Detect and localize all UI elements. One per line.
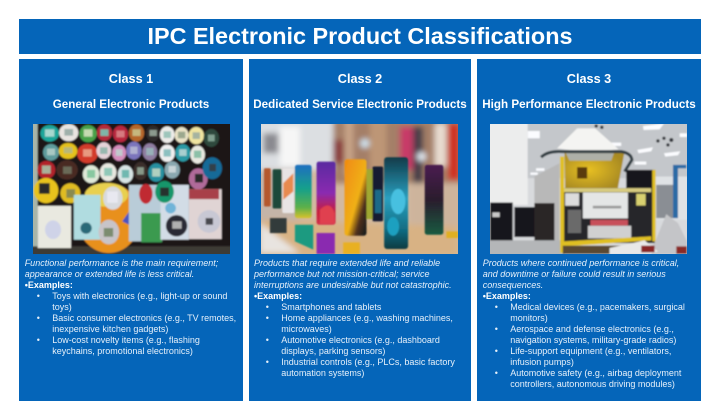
image: collection of electronic toys [33,124,230,254]
example: life-support: Life-support equipment (e.g., ventilators, [510,346,671,356]
label: examples: •Examples: [483,290,531,300]
description: class 3: consequences. [483,280,543,290]
example: aerospace and defense [510,324,676,346]
example: automotive electronics [281,334,440,356]
example: aerospace and defense: Aerospace and defense electronics (e.g., [510,324,674,334]
example: industrial controls: automation systems) [281,368,364,378]
subheading: dedicated service electronic products: Dedicated Service Electronic Products [253,98,467,110]
subheading: high performance electronic products: High Performance Electronic Products [482,98,696,110]
label: examples: •Examples: [254,290,302,300]
image: spacecraft in clean room [490,124,687,254]
example: home appliances: Home appliances (e.g., washing machines, [281,312,453,322]
example: toys: toys) [52,302,72,312]
heading: class 3: Class 3 [567,72,611,86]
example: industrial controls: Industrial controls (e.g., PLCs, basic factory [281,356,455,366]
examples list: class 2 [254,290,455,378]
description: class 1 [24,258,218,279]
example: automotive safety: Automotive safety (e.g., airbag deployment [510,368,681,378]
example: toys: Toys with electronics (e.g., light-up or sound [52,290,227,300]
label: examples: •Examples: [25,280,73,290]
example: basic consumer electronics [52,312,236,334]
example: home appliances: microwaves) [281,324,332,334]
image: row of smartphones on display [261,124,458,254]
examples list: class 1 [25,280,236,356]
example: medical devices: Medical devices (e.g., pacemakers, surgical [510,302,685,312]
example: medical devices [510,302,685,324]
panel: class 2 [249,59,471,401]
heading: class 1: Class 1 [109,72,153,86]
example: novelty items: keychains, promotional electronics) [52,346,193,356]
example: industrial controls [281,356,455,378]
example: basic consumer electronics: Basic consumer electronics (e.g., TV remotes, [52,312,236,322]
example: aerospace and defense: navigation systems, military-grade radios) [510,334,676,344]
example: novelty items [52,334,200,356]
title banner [19,19,701,54]
description: class 1: appearance or extended life is less critical. [25,268,194,278]
heading: class 2: Class 2 [338,72,382,86]
description: class 3: and downtime or failure could result in serious [483,268,666,278]
example: automotive electronics: displays, parking sensors) [281,346,385,356]
example: toys [52,290,227,312]
description: class 3: Products where continued performance is critical, [483,258,679,268]
example: automotive safety [510,368,681,390]
panel: class 1 [19,59,243,401]
example: life-support: infusion pumps) [510,356,574,366]
example: life-support [510,346,671,368]
example: home appliances [281,312,453,334]
example: smartphones: Smartphones and tablets [281,302,381,312]
description: class 2 [254,258,452,290]
example: novelty items: Low-cost novelty items (e.g., flashing [52,334,200,344]
description: class 3 [482,258,679,290]
example: medical devices: monitors) [510,312,548,322]
description: class 2: interruptions are undesirable but not catastrophic. [254,280,452,290]
example: automotive safety: controllers, autonomous driving modules) [510,378,675,388]
example: automotive electronics: Automotive electronics (e.g., dashboard [281,334,440,344]
example: basic consumer electronics: inexpensive kitchen gadgets) [52,324,168,334]
description: class 2: Products that require extended life and reliable [254,258,440,268]
examples list: class 3 [483,290,685,389]
description: class 2: performance but not mission-critical; service [254,268,430,278]
title banner: IPC Electronic Product Classifications [147,23,573,49]
description: class 1: Functional performance is the main requirement; [25,258,218,268]
subheading: general electronic products: General Electronic Products [53,98,209,110]
panel: class 3 [477,59,701,401]
